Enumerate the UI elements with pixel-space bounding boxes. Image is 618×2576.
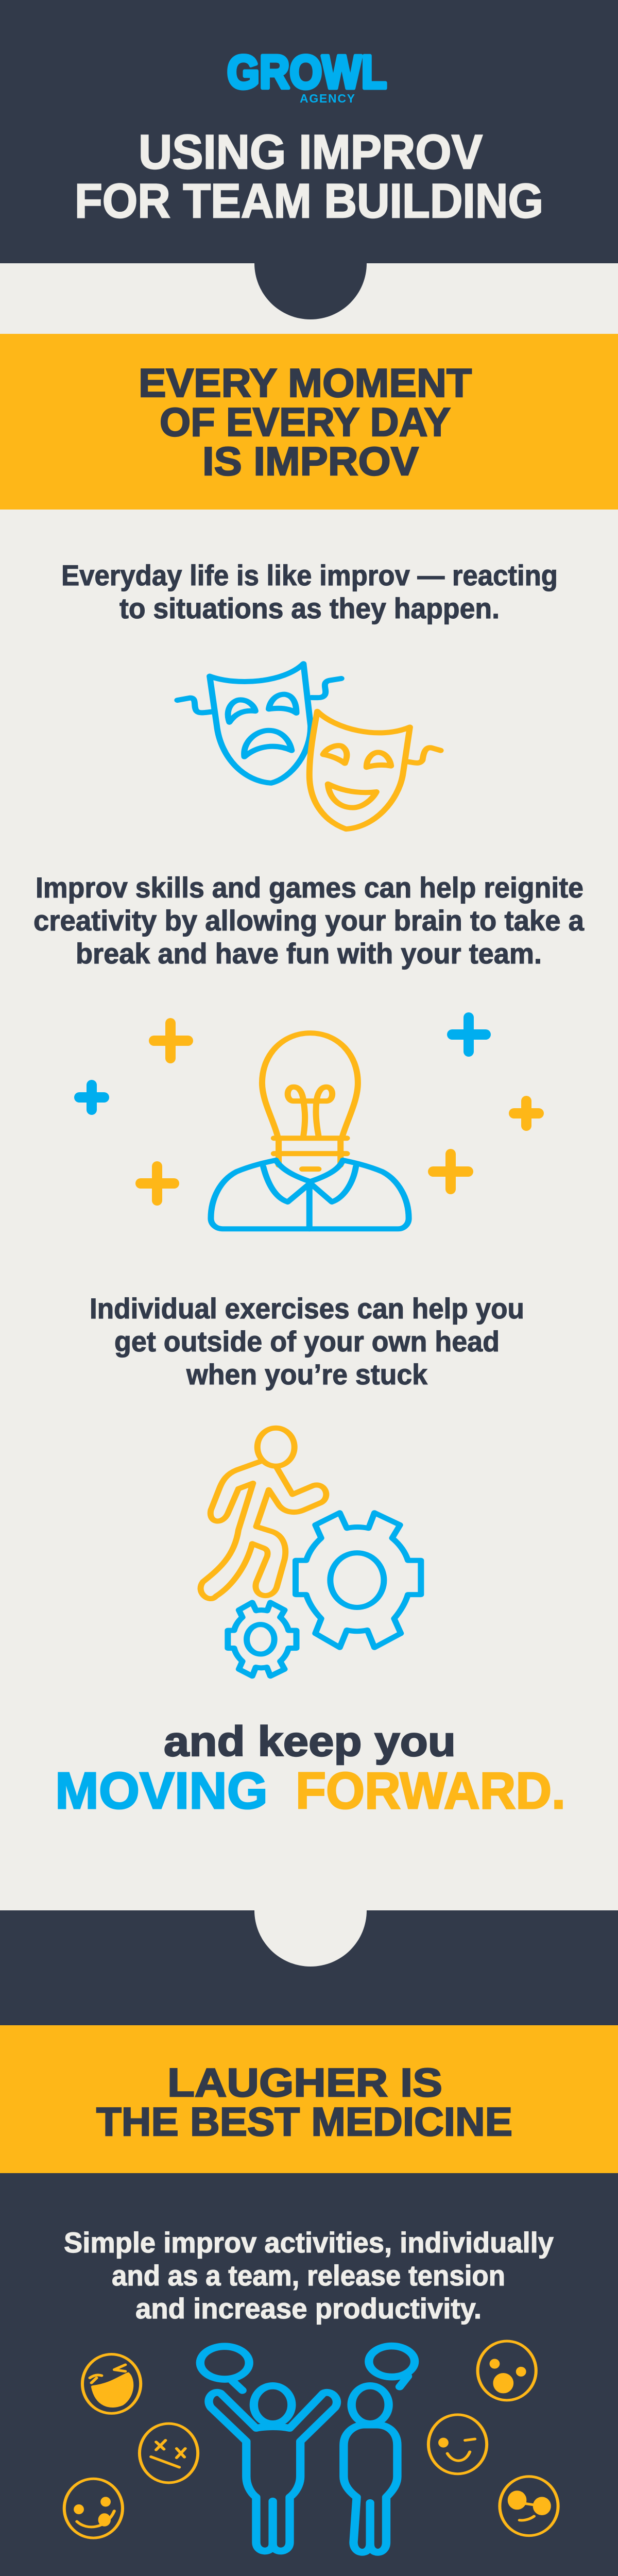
text: everyday life: Everyday life is like improv — reacting (61, 559, 558, 591)
text: simple improv activities: Simple improv activities, individually (64, 2226, 554, 2259)
text: individual exercises: get outside of your own head (114, 1325, 500, 1358)
title: USING IMPROV (139, 125, 483, 179)
icon: person with lightbulb head (211, 1033, 409, 1229)
text: moving forward: FORWARD. (296, 1762, 565, 1820)
emoji: laughing (82, 2354, 141, 2413)
panel: dark section background (0, 1910, 618, 2576)
text: simple improv activities: and increase productivity. (135, 2292, 482, 2325)
text: moving forward (55, 1762, 565, 1820)
heading: every moment of every day is improv: OF EVERY DAY (160, 399, 451, 445)
text: individual exercises: when you’re stuck (186, 1358, 428, 1391)
text: everyday life: to situations as they happen. (119, 592, 500, 624)
text: and keep you: and keep you (164, 1718, 456, 1765)
text: simple improv activities (64, 2226, 554, 2325)
heading: every moment of every day is improv (139, 360, 472, 484)
icon: runner and gears (201, 1428, 421, 1676)
icon: theatre masks (177, 664, 441, 829)
section notch (254, 1910, 367, 1967)
emoji: tongue out (64, 2479, 123, 2538)
title (75, 125, 543, 228)
panel: yellow banner every moment (0, 334, 618, 510)
text: improv skills: Improv skills and games can help reignite (36, 871, 583, 904)
heading: laughter is the best medicine (96, 2060, 512, 2144)
heading: every moment of every day is improv: IS IMPROV (202, 438, 419, 484)
emoji: surprised (478, 2341, 536, 2400)
emoji: dizzy (140, 2424, 198, 2483)
panel: header background (0, 0, 618, 263)
heading: every moment of every day is improv: EVERY MOMENT (139, 360, 472, 405)
header notch (254, 263, 367, 319)
text: improv skills: creativity by allowing your brain to take a (33, 904, 585, 937)
text: simple improv activities: and as a team, release tension (112, 2259, 505, 2292)
icon: emoji faces (64, 2341, 558, 2538)
icon: plus signs (79, 1018, 539, 1200)
text: improv skills: break and have fun with your team. (76, 937, 542, 970)
text: everyday life (61, 559, 558, 624)
text: individual exercises (90, 1292, 524, 1391)
panel: light section background (0, 263, 618, 1910)
text: moving forward: MOVING (55, 1762, 268, 1820)
text: improv skills (33, 871, 585, 970)
emoji: sunglasses (500, 2477, 558, 2536)
heading: laughter is the best medicine: THE BEST MEDICINE (96, 2099, 512, 2144)
logo: Growl Agency: GROWL (227, 46, 387, 98)
heading: laughter is the best medicine: LAUGHER IS (167, 2060, 442, 2105)
panel: yellow banner laughter (0, 2025, 618, 2173)
icon: two people with speech bubbles (200, 2346, 415, 2552)
title: FOR TEAM BUILDING (75, 174, 543, 228)
emoji: winking (428, 2415, 487, 2474)
logo: Growl Agency: AGENCY (300, 92, 355, 105)
text: individual exercises: Individual exercises can help you (90, 1292, 524, 1325)
